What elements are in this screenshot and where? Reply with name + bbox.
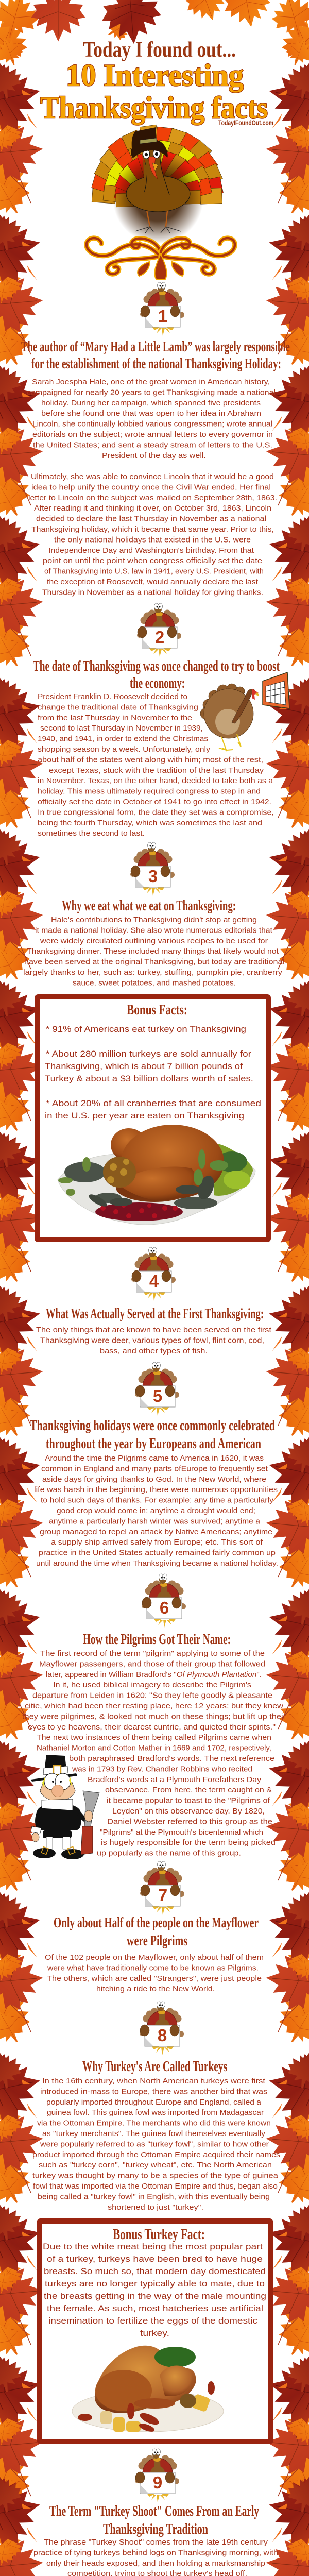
text: fact 8 body: product imported through the Ottoman Empire acquired their names [32,2151,280,2159]
text: fact 2 body: shopping season by a week. Unfortunately, only [38,745,211,754]
turkey body [126,176,190,212]
text: fact 1 body: idea to help unify the country once the Civil War ended. Her final [31,483,271,492]
text: fact 1 body: letter to Lincoln on the subject was mailed on September 28th, 1863. [28,494,277,502]
text: fact 8 body: introduced in-mass to Europe, there was another bird that was [40,2088,267,2096]
text: fact 1 body: the only national holidays that existed in the U.S. were [54,536,251,544]
text: fact 6 body: "Pilgrims" at the Plymouth's bicentennial which [100,1828,263,1837]
icon: turkey sign 3: 3 [148,867,158,886]
text: fact 6 body [22,1650,286,1858]
text: fact 1 body: point on until the point when congress officially set the date [43,557,262,565]
leaf border: top band [0,0,309,46]
turkey tail feathers [92,125,224,207]
text: fact 2 body [38,693,274,838]
text: fact 6 body: Leyden" on this observance day. By 1820, [112,1807,265,1816]
text: fact 4 body [36,1326,271,1355]
text: fact 1 body: Lincoln, she continually lobbied various congressmen; wrote annual [32,420,272,429]
text: bonus turkey fact: Due to the white meat being the most popular part [43,2242,263,2251]
icon: turkey looking at calendar [200,672,289,751]
text: fact 4 body: The only things that are known to have been served on the first [36,1326,271,1334]
text: fact 1 body: President of the day as well. [102,452,206,460]
text: fact 9 body: The phrase "Turkey Shoot" comes from the late 19th century [44,2538,268,2547]
pilgrim hat [131,127,168,158]
text: fact 7 body: hitching a ride to the New World. [96,1985,215,1993]
text: fact 5 body: common in England and many parts ofEurope to frequently set [41,1465,268,1473]
text: fact 6 body: Daniel Webster referred to this group as the [107,1818,272,1826]
text: bonus turkey fact: the female. As such, most hatcheries use artificial [47,2304,263,2313]
text: fact 7 body: Of the 102 people on the Mayflower, only about half of them [45,1954,264,1962]
icon: turkey sign 2: 2 [155,628,164,647]
text: fact 8 body: via the Ottoman Empire. The merchants who did this were known [37,2120,271,2128]
text: fact 1 body: holiday. During her campaign, which spanned five presidents [41,399,261,408]
text: bonus turkey fact [43,2242,266,2338]
panel: fact 8 [32,2002,280,2212]
text: fact 8 body: were popularly referred to as "turkey fowl", similar to how other [40,2140,269,2148]
text: fact 5 body: practice in the United States actually remained fairly common up [39,1549,276,1557]
title: Thanksgiving facts [40,91,268,125]
text: fact 2 body: from the last Thursday in November to the [38,714,192,722]
text: fact 2 body: about half of the states went along with him; most of the rest, [38,756,263,764]
icon: turkey sign 9 [135,2449,179,2502]
text: fact 4 body: Thanksgiving were deer, various types of fowl, flint corn, cod, [40,1336,264,1345]
panel: bonus facts [37,997,268,1240]
text: fact 3 body: it made a national holiday. She also wrote numerous editorials that [35,926,272,935]
text: fact 2 body: sometimes the second to last. [38,829,145,838]
text: fact 6 body: it became popular to toast to the "Pilgrims of [107,1797,270,1805]
text: fact 1 body [27,378,277,597]
icon: turkey sign 7 [140,1861,184,1915]
text: fact 6 body: up popularly as the name of this group. [97,1850,241,1858]
icon: turkey sign 2 [137,603,181,657]
text: fact 5 body [34,1454,278,1568]
text: fact 2 body: in November. Texas, on the other hand, decided to take both as a [38,777,273,785]
text: bonus fact list: * About 20% of all cranberries that are consumed [46,1099,261,1108]
text: fact 8 body: fowl that was imported via the Ottoman Empire and thus, began also [33,2182,278,2191]
image: roast turkey on platter [58,1125,255,1225]
panel: fact 7 [45,1861,264,1993]
text: bonus turkey fact: turkey. [140,2329,169,2338]
heading: fact 2 [33,658,280,691]
text: fact 6 body: Bradford's words at a Plymouth Forefathers Day [88,1776,262,1784]
text: fact 1 body: After reading it and thinking it over, on October 3rd, 1863, Lincoln [34,504,271,513]
text: fact 8 body: as "turkey merchants". The guinea fowl themselves eventually [42,2130,266,2138]
icon: cartoon pilgrim with blunderbuss [31,1755,99,1859]
text: fact 5 body: anytime a particularly harsh winter was survived; anytime a [49,1517,261,1526]
ornament: swirl divider [87,238,235,279]
text: fact 1 body: Independence Day and Washington's birthday. From that [48,547,254,555]
text: fact 3 body: have been served at the original Thanksgiving, but today are traditional [24,958,284,967]
icon: turkey sign 8 [140,2002,184,2055]
heading: fact 5 [30,1417,275,1452]
panel: fact 3 [23,842,284,987]
text: fact 6 body: Nathaniel Morton and Cotton Mather in 1669 and 1702, respectively, [37,1744,271,1753]
heading: fact 7: were Pilgrims [127,1933,187,1949]
text: fact 5 body: good crop would come in; anytime a drought would end; [57,1507,255,1515]
text: fact 8 body: In the 16th century, when North American turkeys were first [42,2077,265,2086]
bonus facts box [37,997,268,1240]
text: fact 6 body: The first record of the term "pilgrim" applying to some of the [40,1650,265,1658]
text: fact 6 body: they were pilgrimes, & looked not much on these things; but lift up their [22,1713,286,1721]
heading: fact 2: the economy: [130,675,185,691]
text: fact 5 body: to hold such days of thanks. For example: any time a particularly [41,1497,274,1505]
text: fact 1 body: Ultimately, she was able to convince Lincoln that it would be a good [31,473,274,481]
heading: bonus turkey fact: Bonus Turkey Fact: [113,2226,205,2243]
panel: fact 5 [30,1362,278,1568]
text: bonus turkey fact: insemination to fertilize the eggs of the domestic [48,2316,258,2326]
text: fact 6 body: is hugely responsible for the term being picked [101,1839,276,1847]
text: fact 6 body: citie, which had been ther resting place, here 12 years; but they knew [25,1702,284,1710]
icon: turkey sign 3 [130,842,175,896]
panel: fact 2 [33,603,289,838]
text: fact 4 body: bass, and other types of fish. [100,1347,208,1355]
text: fact 2 body: being the fourth Thursday, which was sometimes the last and [38,819,262,827]
text: fact 8 body: guinea fowl. This guinea fowl was imported from Madagascar [47,2109,264,2117]
text: fact 3 body: Hale's contributions to Thanksgiving didn't stop at getting [51,916,257,924]
turkey legs [135,210,181,233]
text: bonus fact list: Turkey & about a $3 billion dollars worth of sales. [45,1074,253,1083]
text: fact 7 body: were what have traditionally come to be known as Pilgrims. [47,1964,259,1972]
text: bonus turkey fact: the breasts getting in the way of the male mounting [44,2292,266,2301]
title: 10 Interesting [66,58,244,92]
text: fact 1 body: the United States; and sent a steady stream of letters to the U.S. [33,441,272,449]
leaf border: right column [262,9,309,2576]
text: fact 1 body: Sarah Joespha Hale, one of the great women in American history, [32,378,270,386]
heading: fact 9: Thanksgiving Tradition [103,2521,208,2537]
text: fact 2 body: holiday. This mess ultimately required congress to step in and [38,788,261,796]
panel: fact 9 [33,2449,278,2576]
text: bonus fact list: in the U.S. per year are eaten on Thanksgiving [45,1111,244,1121]
bonus turkey fact box [39,2221,271,2442]
text: fact 9 body: practice of tying turkeys behind logs on Thanksgiving morning, with [33,2549,278,2557]
text: fact 3 body: largely thanks to her, such as: turkey, stuffing, pumpkin pie, cranberry [23,969,283,977]
text: fact 5 body: Around the time the Pilgrims came to America in 1620, it was [45,1454,264,1463]
icon: pilgrim hat turkey [92,125,224,244]
text: fact 7 body [45,1954,264,1993]
icon: turkey sign 1: 1 [158,307,167,326]
text: fact 9 body: only their heads exposed, and then holding a marksmanship [46,2560,265,2568]
text: bonus turkey fact: turkeys are no longer typically able to mate, due to [45,2279,265,2289]
panel: fact 6 [22,1574,286,1859]
title [40,38,273,127]
text: fact 2 body: 1940, and 1941, in order to extend the Christmas [38,735,208,743]
text: fact 1 body: the exception of Roosevelt, would annually declare the last [47,578,258,586]
text: fact 2 body: except Texas, stuck with the tradition of the last Thursday [49,767,264,775]
text: fact 3 body: Thanksgiving dinner. These included many things that likely would not [27,947,279,956]
heading: fact 7 [54,1914,259,1949]
text: fact 2 body: President Franklin D. Roosevelt decided to [38,693,187,701]
text: fact 1 body: campaigned for nearly 20 years to get Thanksgiving made a national [27,388,276,397]
panel: fact 1 [21,282,290,597]
leaf border: left column [0,9,47,2576]
icon: turkey sign 7: 7 [158,1886,167,1905]
text: fact 8 body: turkey was thought by many to be a species of the type of guinea [32,2172,279,2180]
text: fact 3 body [23,916,284,987]
icon: turkey sign 6 [142,1574,186,1628]
text: fact 5 body: group managed to repel an attack by Native Americans; anytime [40,1528,272,1536]
text: fact 1 body: of Thanksgiving into U.S. law in 1941, every U.S. President, with [44,568,264,576]
text: bonus fact list: * About 280 million turkeys are sold annually for [46,1049,252,1059]
text: fact 6 body: both paraphrased Bradford's words. The next reference [69,1755,274,1763]
heading: bonus facts: Bonus Facts: [127,1002,187,1018]
text: fact 6 body: Mayflower passengers, and those of their group that followed [39,1660,265,1668]
turkey head [142,145,162,164]
text: fact 6 body: observance. From here, the term caught on & [105,1786,272,1794]
text: fact 5 body: until around the time when Thanksgiving became a national holiday. [36,1560,278,1568]
text: fact 8 body: such as "turkey corn", "turkey wheat", etc. The North American [39,2161,272,2170]
text: fact 1 body: Thursday in November as a national holiday for giving thanks. [42,588,263,597]
text: fact 1 body: Thanksgiving holiday, which it became that same year. Prior to this, [31,526,274,534]
text: bonus fact list: * 91% of Americans eat turkey on Thanksgiving [46,1025,246,1034]
heading: fact 8: Why Turkey's Are Called Turkeys [82,2058,227,2075]
icon: turkey sign 6: 6 [160,1598,169,1617]
text: fact 9 body [33,2538,278,2576]
text: bonus fact list: Thanksgiving, which is about 7 billion pounds of [45,1062,243,1071]
text: fact 3 body: sauce, sweet potatoes, and mashed potatoes. [73,979,236,987]
text: bonus fact list [45,1025,261,1121]
text: fact 5 body: aside days for giving thanks to God. In the New World, where [42,1476,266,1484]
text: fact 6 body: eyes to ye heavens, their dearest cuntrie, and quieted their spirits." [28,1723,276,1732]
panel: bonus turkey fact [39,2221,271,2442]
text: bonus turkey fact: of a turkey, turkeys have been bred to have huge [47,2255,263,2264]
icon: turkey sign 5: 5 [153,1386,162,1405]
title: TodayIFoundOut.com [218,119,273,127]
text: fact 5 body: a supply ship arrived safely from Europe; etc. This sort of [51,1538,263,1547]
image: roast turkey with potatoes [72,2346,224,2433]
text: fact 1 body: editorials on the subject; wrote annual letters to every governor in [32,431,273,439]
text: fact 1 body: decided to declare the last Thursday in November as a national [36,515,266,523]
icon: turkey sign 5 [135,1362,179,1416]
icon: turkey sign 1 [140,282,184,336]
text: fact 2 body: second to last Thursday in November in 1939, [40,724,203,733]
text: fact 1 body: before she found one that was open to her idea in Abraham [41,410,261,418]
text: fact 3 body: were widely circulated outlining various recipes to be used for [40,937,268,945]
text: fact 6 body: later, appeared in William Bradford's " Of Plymouth Plantation ". [46,1671,262,1679]
heading: fact 9 [49,2503,259,2537]
text: fact 6 body: In it, he used biblical imagery to describe the Pilgrim's [53,1681,251,1689]
icon: turkey sign 9: 9 [153,2473,162,2492]
text: fact 2 body: change the traditional date of Thanksgiving [38,703,198,711]
text: fact 8 body: shortened to just "turkey". [108,2204,203,2212]
title: Today I found out... [83,38,236,62]
text: fact 2 body: In true congressional form, the date they set was a compromise, [38,808,274,817]
icon: turkey sign 8: 8 [158,2026,167,2045]
text: fact 5 body: life was harsh in the beginning, there were numerous opportunities [34,1486,278,1494]
text: fact 6 body: was in 1793 by Rev. Chandler Robbins who recited [72,1765,252,1773]
icon: turkey sign 4: 4 [149,1272,159,1291]
text: fact 8 body: popularly imported throughout Europe and England, called a [46,2098,262,2107]
heading: fact 1 [21,338,290,372]
panel: fact 4 [36,1247,271,1355]
text: fact 6 body: The next two instances of them being called Pilgrims came when [37,1734,271,1742]
heading: fact 6: How the Pilgrims Got Their Name: [83,1631,231,1648]
icon: turkey sign 4 [131,1247,176,1301]
text: fact 6 body: departure from Leiden in 1620: "So they lefte goodly & pleasante [32,1692,272,1700]
text: fact 8 body [32,2077,280,2212]
text: fact 2 body: officially set the date in October of 1941 to go into effect in 1942. [38,798,271,806]
text: bonus turkey fact: breasts. So much so, that modern day domesticated [44,2267,266,2276]
text: fact 7 body: The others, which are called "Strangers", were just people [47,1975,262,1983]
text: fact 8 body: being called a "turkey fowl" in English, with this eventually being [38,2193,270,2201]
